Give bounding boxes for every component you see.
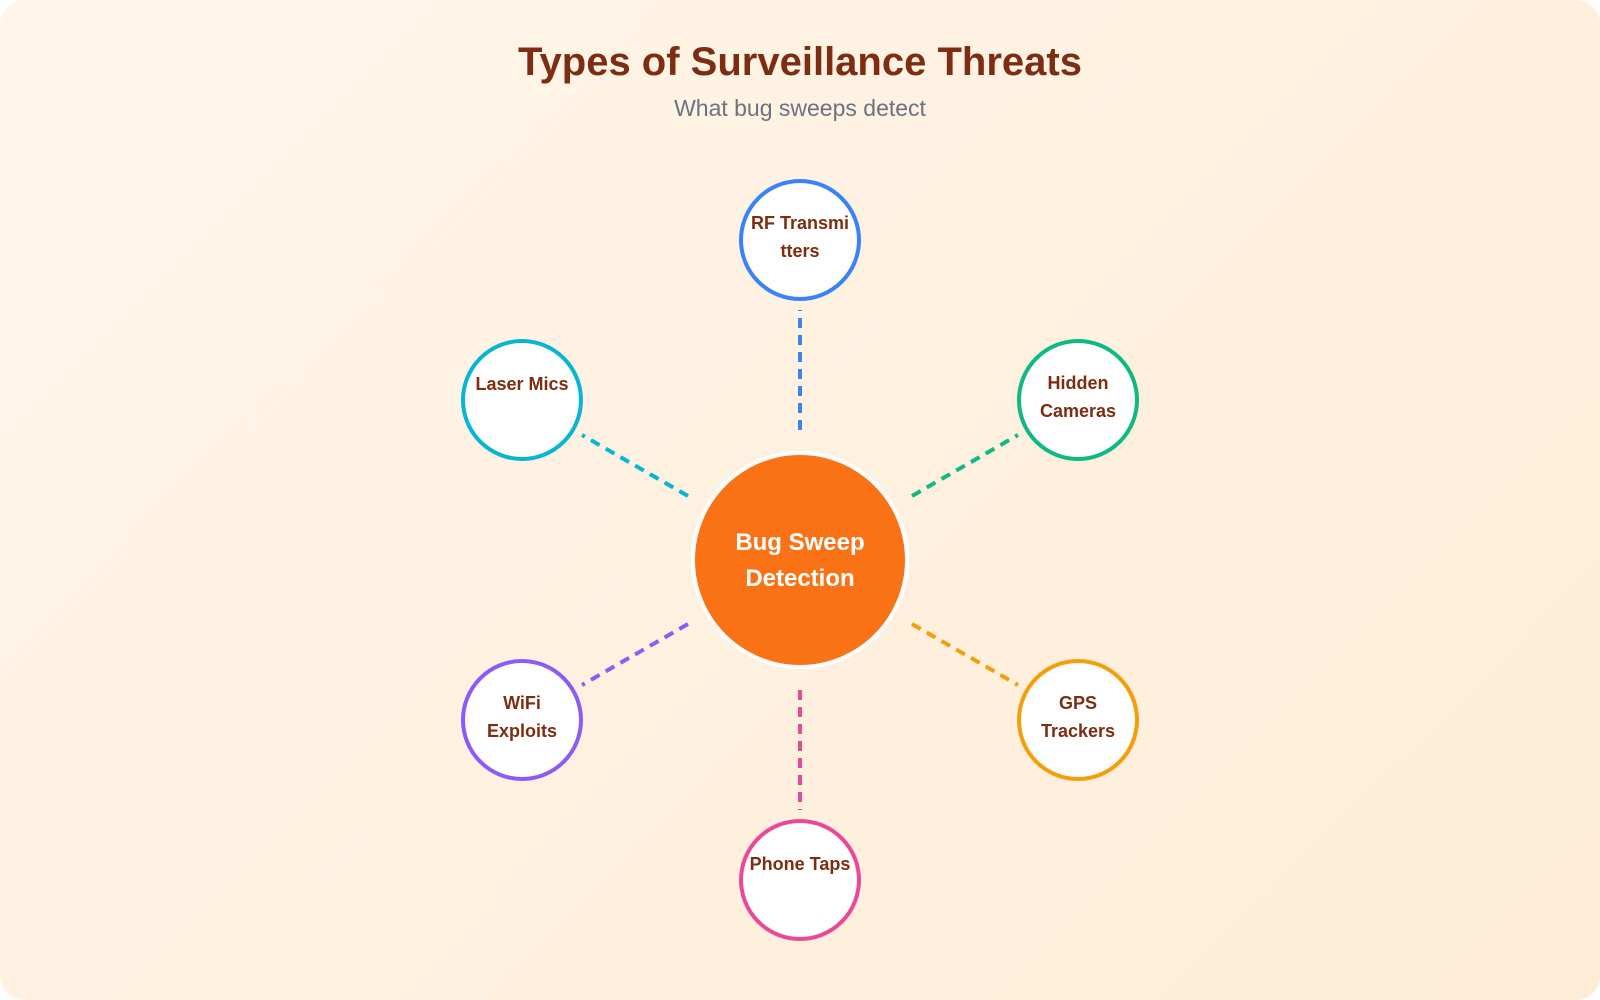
node: Hidden Cameras: Hidden xyxy=(1048,373,1108,393)
node: Phone Taps: Phone Taps xyxy=(750,854,850,874)
title: Types of Surveillance Threats xyxy=(518,40,1082,84)
center node xyxy=(691,451,909,669)
center node: Detection xyxy=(745,565,855,592)
node: GPS Trackers: GPS xyxy=(1059,693,1097,713)
node: Laser Mics: Laser Mics xyxy=(475,374,569,394)
node: GPS Trackers xyxy=(1019,661,1137,779)
node: WiFi Exploits: WiFi xyxy=(503,693,541,713)
connector lines xyxy=(582,310,1018,810)
node: GPS Trackers: Trackers xyxy=(1041,721,1115,741)
node: Phone Taps xyxy=(741,821,859,939)
node: WiFi Exploits: Exploits xyxy=(487,721,557,741)
subtitle: What bug sweeps detect xyxy=(674,95,927,121)
node: RF Transmitters: RF Transmi xyxy=(751,213,849,233)
node: Hidden Cameras: Cameras xyxy=(1040,401,1116,421)
center node: Bug Sweep xyxy=(735,529,865,556)
node: WiFi Exploits xyxy=(463,661,581,779)
node: RF Transmitters: tters xyxy=(780,241,820,261)
node: RF Transmitters xyxy=(741,181,859,299)
node: Hidden Cameras xyxy=(1019,341,1137,459)
node: Laser Mics xyxy=(463,341,581,459)
